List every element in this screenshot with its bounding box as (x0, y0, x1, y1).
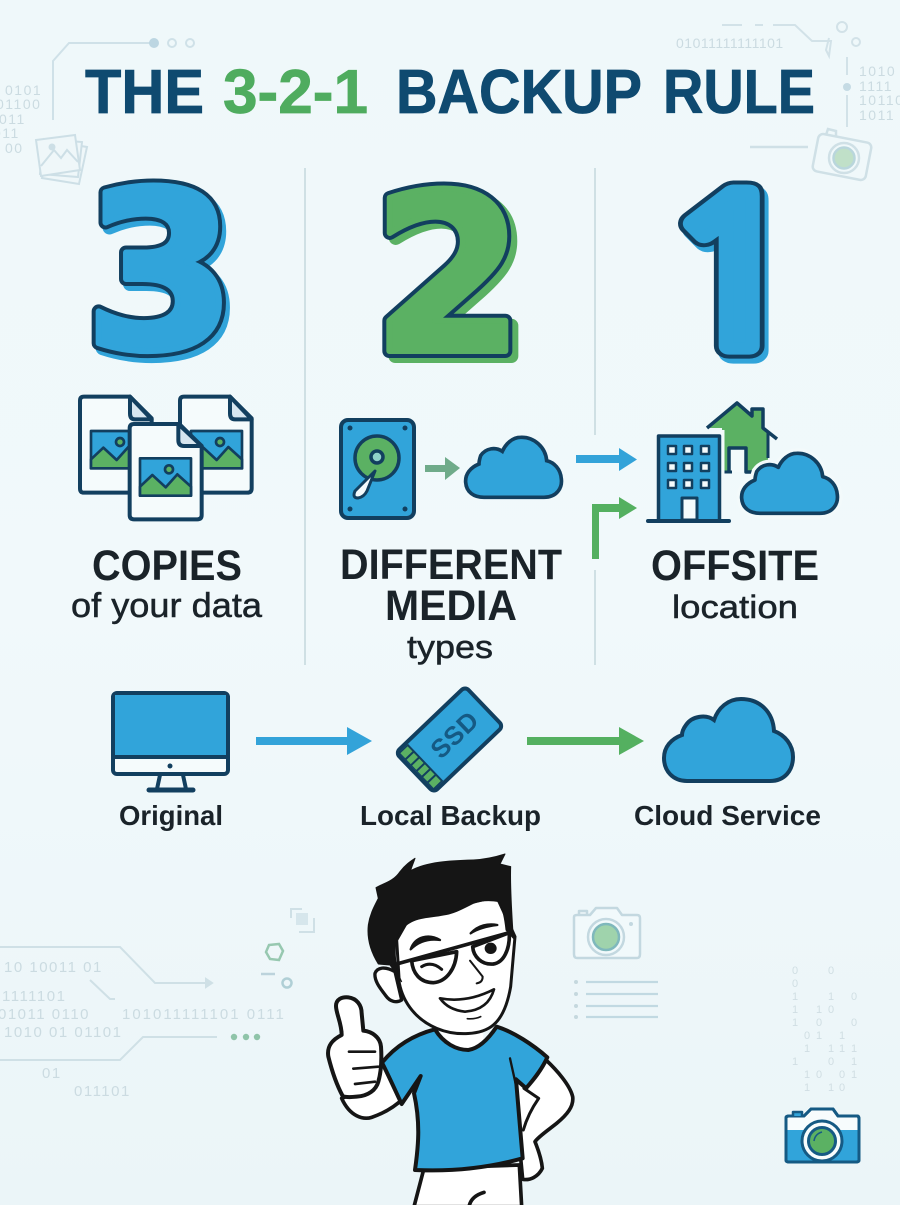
building (648, 436, 729, 521)
label: offsite location: location (672, 589, 798, 625)
decoration: top-right binary: 1010 (859, 63, 896, 79)
front document (130, 424, 202, 519)
decoration: binary rain: 1111 (804, 1043, 857, 1055)
ear (375, 968, 402, 1002)
decoration: faint list (574, 980, 658, 1019)
icon: hard drive (341, 420, 414, 518)
illustration: thumbs-up character (328, 854, 573, 1205)
decoration: bottom-left binary: 011101 (74, 1083, 131, 1100)
back left document (80, 397, 152, 493)
eye (485, 943, 497, 954)
arrow: green elbow to offsite (592, 497, 637, 559)
house (707, 403, 777, 472)
label: copies (71, 542, 262, 625)
decoration: bottom-left binary: 01 (42, 1065, 62, 1082)
numeral 3: 3 (84, 145, 236, 400)
label: different media types: MEDIA (385, 582, 517, 630)
label: offsite location (651, 542, 819, 625)
icon: faint camera top right (750, 129, 872, 181)
neck (437, 1023, 483, 1049)
label: copies: COPIES (92, 542, 242, 590)
decoration: top-right binary: 1011 (859, 107, 895, 123)
arrow: original to local backup (256, 727, 372, 755)
hand (328, 997, 381, 1097)
title: 3-2-1 (223, 58, 368, 127)
shirt (382, 1027, 547, 1170)
icon: three file copies (80, 397, 252, 519)
right arm (513, 1060, 573, 1180)
decoration: small shapes (231, 909, 314, 1040)
title: RULE (663, 58, 815, 127)
decoration: binary rain: 011 (804, 1030, 845, 1042)
label: original: Original (119, 800, 223, 831)
numeral 1: 1 (658, 174, 809, 380)
icon: SSD (396, 686, 503, 793)
title: BACKUP (396, 58, 642, 127)
numeral 2: 2 (372, 148, 524, 403)
wink (422, 964, 442, 969)
icon: colored camera (786, 1109, 859, 1162)
arrow: local backup to cloud (527, 727, 644, 755)
decoration: binary rain: 0 (792, 978, 798, 990)
label: cloud service: Cloud Service (634, 800, 821, 831)
label: offsite location: OFFSITE (651, 542, 819, 590)
hair (368, 854, 513, 982)
back right document (180, 397, 252, 493)
decoration: top-right binary: 01011111111101 (676, 35, 784, 51)
label: copies: of your data (71, 587, 262, 625)
decoration: top-right binary: 1111 (859, 78, 893, 94)
decoration: binary rain: 1001 (804, 1069, 857, 1081)
eyebrows (411, 937, 440, 949)
title: THE (85, 58, 204, 127)
mouth (440, 989, 494, 1012)
decoration: binary rain: 100 (792, 1017, 857, 1029)
decoration: bottom-left binary: 01011 0110 (0, 1006, 90, 1023)
title (85, 58, 815, 127)
label: different media types: DIFFERENT (340, 541, 562, 589)
glasses (397, 933, 509, 983)
decoration: binary rain: 110 (804, 1082, 845, 1094)
left arm (342, 1063, 403, 1118)
numeral 1: 1 (662, 179, 813, 385)
arrow: hard drive to cloud (425, 457, 460, 480)
icon: faint photo stack (36, 135, 87, 184)
decoration: top-left circuit (53, 38, 194, 120)
decoration: top-right binary (676, 35, 900, 123)
icon: faint camera (574, 908, 640, 958)
decoration: binary rain: 110 (792, 1004, 834, 1016)
decoration: top-right circuit (722, 22, 860, 127)
decoration: bottom-left binary: 1010 01 01101 (4, 1024, 122, 1041)
icon: SSD: SSD (424, 705, 485, 764)
decoration: binary rain: 101 (792, 1056, 857, 1068)
label: different media types: types (407, 629, 493, 665)
numeral 2: 2 (378, 153, 530, 408)
icon: offsite location (648, 403, 837, 521)
decoration: binary rain: 110 (792, 991, 857, 1003)
decoration: binary rain: 00 (792, 965, 834, 977)
arrow: blue to offsite (576, 448, 637, 471)
cloud (742, 453, 837, 513)
numeral 1: 1 (658, 174, 809, 380)
label: local backup: Local Backup (360, 800, 541, 831)
decoration: bottom-left binary: 10 10011 01 (4, 959, 103, 976)
face (397, 897, 515, 1034)
numeral 3: 3 (88, 150, 240, 405)
icon: cloud (466, 437, 561, 497)
decoration: top-left binary: 00 (5, 140, 24, 156)
decoration: binary rain (792, 965, 857, 1094)
numeral 3: 3 (84, 145, 236, 400)
icon: monitor (113, 693, 228, 790)
decoration: top-left binary (0, 82, 42, 156)
decoration: bottom-left binary: 101011111101 0111 (122, 1006, 286, 1023)
nose (470, 961, 483, 983)
decoration: bottom-left circuit (0, 947, 217, 1060)
label: different media types (340, 541, 562, 665)
decoration: top-left binary: 0101 (5, 82, 42, 98)
numeral 2: 2 (372, 148, 524, 403)
decoration: bottom-left binary: 1111101 (2, 988, 66, 1005)
icon: cloud service (664, 699, 793, 781)
decoration: bottom-left binary (0, 959, 286, 1100)
legs (414, 1165, 522, 1205)
